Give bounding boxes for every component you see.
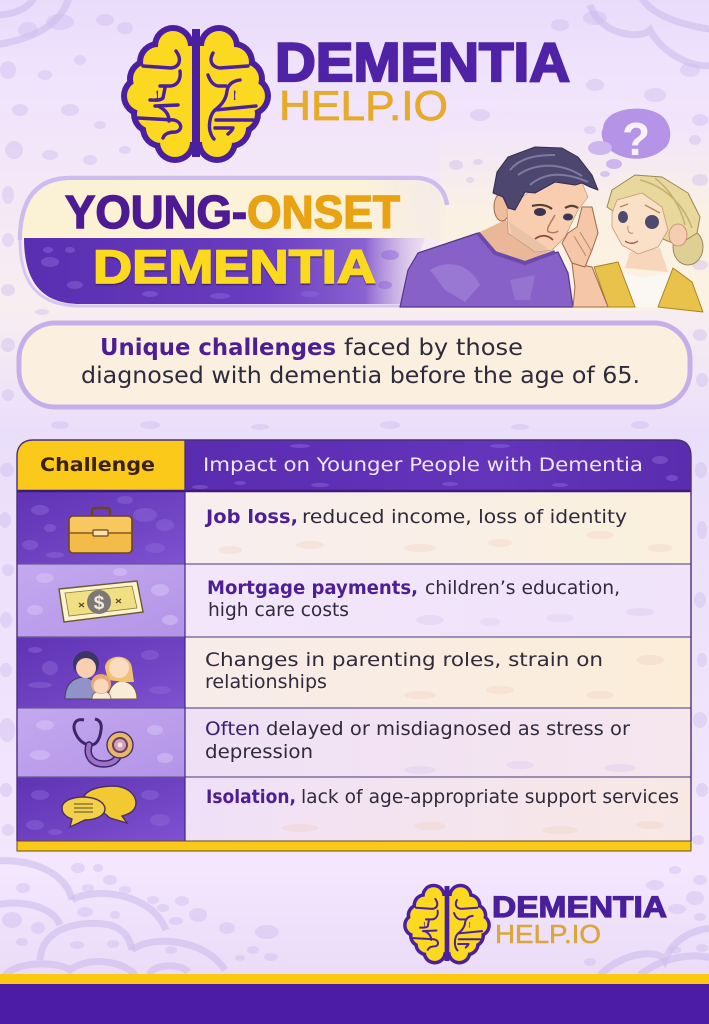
row 3 text line 1: Changes in parenting roles, strain on <box>205 649 603 671</box>
row 2 text line 1: Mortgage payments,children’s education, <box>207 577 620 599</box>
icon: brain <box>121 25 271 163</box>
icon: question thought bubble <box>588 109 670 177</box>
row 4: diagnosis <box>17 708 691 777</box>
subtitle panel <box>19 323 690 407</box>
figure: woman <box>594 175 703 312</box>
row 2: finances <box>17 564 691 637</box>
logo wordmark: help.io: HELP.IO <box>279 82 448 129</box>
illustration: worried couple <box>400 109 703 312</box>
table header: challenge <box>17 440 185 491</box>
logo: header <box>121 25 570 163</box>
icon: speech bubbles <box>62 786 136 827</box>
title: dementia: DEMENTIA <box>93 240 376 293</box>
icon: banknote: $ <box>94 593 105 614</box>
row 2 text line 2: high care costs <box>208 599 349 621</box>
title: young-onset: YOUNG-ONSET <box>65 186 400 238</box>
icon: question thought bubble: ? <box>622 113 650 165</box>
row 5: isolation <box>17 777 691 841</box>
logo: footer <box>403 884 667 964</box>
subtitle text line 1: Unique challengesfaced by those <box>100 335 523 361</box>
logo wordmark: dementia: DEMENTIA <box>275 31 570 93</box>
subtitle text line 2: diagnosed with dementia before the age of 65. <box>81 363 640 389</box>
banner: cream top <box>22 180 445 240</box>
row 4 text line 2: depression <box>205 741 313 763</box>
table <box>17 440 691 851</box>
footer bar <box>0 974 709 1024</box>
icon: family <box>65 651 137 699</box>
row 1 text: Job loss, reduced income, loss of identity <box>204 506 627 528</box>
footer wordmark: help.io: HELP.IO <box>495 919 601 949</box>
row 5 text: Isolation,lack of age-appropriate support services <box>206 786 679 808</box>
row 3 text line 2: relationships <box>205 671 327 693</box>
icon: briefcase <box>69 508 132 553</box>
row 3: family <box>17 637 691 708</box>
icon: stethoscope <box>74 719 133 764</box>
banner: purple bottom <box>24 238 425 304</box>
table header: challenge: Challenge <box>40 454 155 476</box>
warm tint behind the couple <box>440 130 709 310</box>
table header: impact <box>185 440 691 491</box>
title banner <box>20 178 447 306</box>
table grid lines and footer strip <box>17 440 691 851</box>
row 1: job loss <box>17 491 691 564</box>
row 4 text line 1: Often delayed or misdiagnosed as stress or <box>205 718 630 740</box>
icon: banknote <box>59 581 143 622</box>
banner texture <box>41 247 399 299</box>
footer wordmark: dementia: DEMENTIA <box>492 891 667 924</box>
icon: brain small <box>403 884 491 964</box>
figure: man <box>400 147 608 307</box>
table header: impact: Impact on Younger People with Dementia <box>203 455 643 476</box>
